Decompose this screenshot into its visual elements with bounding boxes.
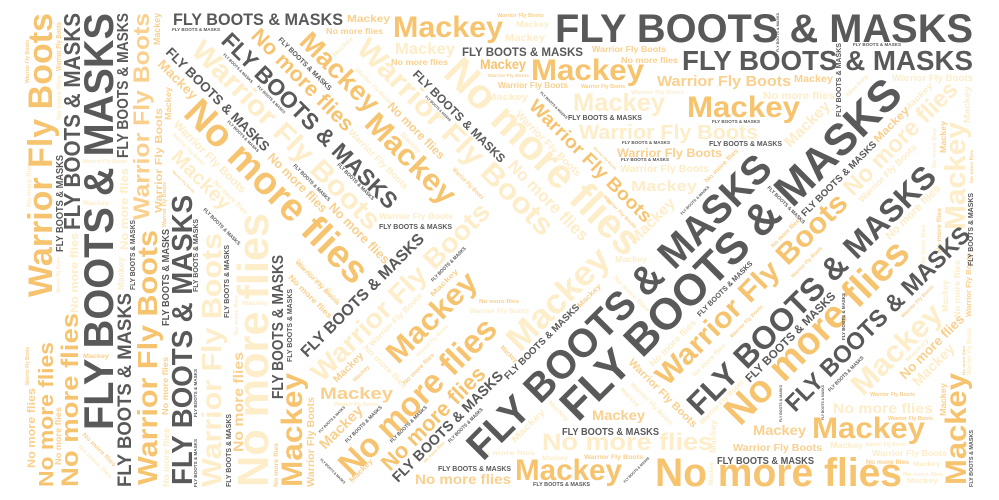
word: No more flies: No more flies <box>326 27 384 36</box>
word: No more flies vertical: No more flies <box>937 207 943 253</box>
word: No more flies vertical: No more flies <box>54 406 63 465</box>
word: Mackey: Mackey <box>542 456 569 462</box>
word: Mackey falling: Mackey <box>619 387 640 409</box>
word: Warrior Fly Boots vertical: Warrior Fly Boots <box>25 40 31 83</box>
word: No more flies vertical: No more flies <box>57 313 84 487</box>
word: No more flies vertical: No more flies <box>69 233 81 313</box>
word: Warrior Fly Boots: Warrior Fly Boots <box>865 442 906 448</box>
word: Warrior Fly Boots vertical: Warrior Fly Boots <box>196 233 227 487</box>
word: No more flies vertical: No more flies <box>961 345 966 375</box>
word: Warrior Fly Boots: Warrior Fly Boots <box>579 122 758 144</box>
word: Warrior Fly Boots vertical: Warrior Fly Boots <box>25 347 31 385</box>
word: Mackey: Mackey <box>687 91 800 124</box>
word: No more flies rising large: No more flies <box>716 231 918 433</box>
word: Mackey rising: Mackey <box>317 403 367 453</box>
word: Warrior Fly Boots: Warrior Fly Boots <box>631 90 684 96</box>
word: Warrior Fly Boots diagonal: Warrior Fly Boots <box>186 34 387 236</box>
word: Mackey rising: Mackey <box>380 265 484 370</box>
word: Warrior Fly Boots rising: Warrior Fly Boots <box>729 304 765 339</box>
phrase: FLY BOOTS & MASKS <box>717 456 815 467</box>
word: Warrior Fly Boots vertical: Warrior Fly Boots <box>306 397 317 487</box>
word: No more flies rising large: No more flies <box>331 310 505 484</box>
word: Mackey: Mackey <box>242 301 269 307</box>
word: No more flies falling: No more flies <box>294 256 343 306</box>
word: Mackey top: Mackey <box>393 11 503 44</box>
word: No more flies: No more flies <box>621 56 679 65</box>
word: No more flies: No more flies <box>479 299 519 305</box>
word: Mackey rising: Mackey <box>845 73 871 98</box>
word: No more flies huge vertical: No more flies <box>229 213 278 487</box>
word: No more flies falling: No more flies <box>326 200 393 267</box>
word: Mackey: Mackey <box>531 54 644 87</box>
phrase: FLY BOOTS & MASKS <box>438 464 511 473</box>
word: Warrior Fly Boots rising: Warrior Fly Boots <box>367 291 425 348</box>
word: No more flies: No more flies <box>391 58 449 67</box>
word: No more flies falling: No more flies <box>612 275 650 314</box>
vertical phrase: FLY BOOTS & MASKS <box>224 414 233 487</box>
rising phrase: FLY BOOTS & MASKS <box>502 302 583 382</box>
word: Warrior Fly Boots falling: Warrior Fly Boots <box>629 381 674 427</box>
falling phrase: FLY BOOTS & MASKS <box>336 162 376 202</box>
vertical phrase: FLY BOOTS & MASKS <box>222 245 231 318</box>
word: Warrior Fly Boots: Warrior Fly Boots <box>584 454 643 461</box>
falling phrase: FLY BOOTS & MASKS <box>163 45 272 154</box>
small phrase: FLY BOOTS & MASKS <box>621 157 669 162</box>
word: No more flies falling: No more flies <box>81 432 117 469</box>
word: Mackey: Mackey <box>395 41 455 58</box>
phrase: FLY BOOTS & MASKS <box>533 482 590 488</box>
word: Mackey: Mackey <box>830 441 864 450</box>
word: Warrior Fly Boots: Warrior Fly Boots <box>497 13 544 19</box>
word: Warrior Fly Boots vertical: Warrior Fly Boots <box>966 253 973 317</box>
rising phrase: FLY BOOTS & MASKS <box>430 246 468 283</box>
vertical phrase: FLY BOOTS & MASKS <box>161 228 172 326</box>
word: Warrior Fly Boots vertical: Warrior Fly Boots <box>56 257 62 293</box>
word: Warrior Fly Boots falling: Warrior Fly Boots <box>294 260 341 307</box>
word: Mackey vertical right: Mackey <box>940 373 973 485</box>
word: Warrior Fly Boots: Warrior Fly Boots <box>83 159 127 165</box>
rising phrase: FLY BOOTS & MASKS <box>695 259 755 318</box>
word: Warrior Fly Boots diagonal: Warrior Fly Boots <box>350 32 560 242</box>
falling phrase: FLY BOOTS & MASKS <box>226 119 260 153</box>
word: Warrior Fly Boots rising large: Warrior Fly Boots <box>649 187 854 392</box>
word: Mackey rising: Mackey <box>352 364 372 383</box>
vertical phrase: FLY BOOTS & MASKS <box>285 289 294 362</box>
word: Mackey rising: Mackey <box>332 35 355 58</box>
vertical phrase: FLY BOOTS & MASKS <box>779 384 783 422</box>
word: Warrior Fly Boots falling: Warrior Fly Boots <box>592 146 617 171</box>
word: No more flies vertical: No more flies <box>57 74 63 120</box>
word: No more flies vertical: No more flies <box>36 342 58 487</box>
falling phrase: FLY BOOTS & MASKS <box>292 163 332 203</box>
word: Warrior Fly Boots: Warrior Fly Boots <box>334 402 378 408</box>
word: Mackey: Mackey <box>907 478 938 485</box>
word: Mackey: Mackey <box>794 74 833 85</box>
word: Mackey: Mackey <box>320 384 394 403</box>
word: Mackey falling: Mackey <box>166 146 236 215</box>
falling phrase: FLY BOOTS & MASKS <box>766 185 806 226</box>
word: Warrior Fly Boots: Warrior Fly Boots <box>888 416 933 422</box>
word: No more flies: No more flies <box>478 451 536 457</box>
word: No more flies large: No more flies <box>542 429 713 456</box>
word: Warrior Fly Boots falling: Warrior Fly Boots <box>171 132 206 168</box>
word: No more flies vertical: No more flies <box>969 149 974 183</box>
word: Warrior Fly Boots rising: Warrior Fly Boots <box>415 324 450 358</box>
vertical phrase: FLY BOOTS & MASKS <box>193 369 198 417</box>
word: Warrior Fly Boots: Warrior Fly Boots <box>872 449 948 458</box>
word: Warrior Fly Boots falling: Warrior Fly Boots <box>171 119 248 196</box>
word: Mackey rising: Mackey <box>576 283 603 309</box>
word: No more flies falling: No more flies <box>287 273 334 321</box>
small phrase: FLY BOOTS & MASKS <box>853 42 901 47</box>
word: Mackey: Mackey <box>573 89 665 117</box>
rising phrase: FLY BOOTS & MASKS <box>827 355 866 393</box>
word: Mackey vertical: Mackey <box>116 257 126 290</box>
word: No more flies falling large: No more flies <box>176 91 377 292</box>
word: Warrior Fly Boots vertical: Warrior Fly Boots <box>129 13 154 220</box>
rising phrase: FLY BOOTS & MASKS <box>298 230 428 361</box>
vertical phrase: FLY BOOTS & MASKS <box>167 195 199 485</box>
word: No more flies falling: No more flies <box>362 343 409 391</box>
word: No more flies: No more flies <box>866 460 910 466</box>
word: No more flies bottom: No more flies <box>655 451 902 495</box>
word: No more flies vertical: No more flies <box>26 388 38 468</box>
word: Mackey rising: Mackey <box>872 104 913 145</box>
word: No more flies falling: No more flies <box>77 444 113 481</box>
word: Mackey vertical: Mackey <box>709 461 715 485</box>
vertical phrase: FLY BOOTS & MASKS <box>821 384 825 420</box>
word: Warrior Fly Boots falling: Warrior Fly Boots <box>347 127 410 191</box>
word: Mackey vertical: Mackey <box>941 279 950 312</box>
word: Mackey rising: Mackey <box>902 80 935 113</box>
word: FLY BOOTS & MASKS top right: FLY BOOTS & MASKS <box>555 7 973 51</box>
falling phrase: FLY BOOTS & MASKS <box>424 95 452 123</box>
word: Mackey rising: Mackey <box>781 97 834 151</box>
word: Warrior Fly Boots big vertical: Warrior Fly Boots <box>132 230 163 485</box>
word: FLY BOOTS & MASKS second: FLY BOOTS & MASKS <box>682 45 973 76</box>
word: No more flies rising: No more flies <box>691 342 728 378</box>
word: Mackey rising: Mackey <box>509 407 547 444</box>
word: No more flies: No more flies <box>415 472 511 487</box>
word: Warrior Fly Boots: Warrior Fly Boots <box>470 308 529 315</box>
word: Mackey falling: Mackey <box>358 107 463 211</box>
rising phrase: FLY BOOTS & MASKS <box>743 290 839 385</box>
word: No more flies falling: No more flies <box>246 24 358 136</box>
word: No more flies rising: No more flies <box>376 361 490 476</box>
word: Mackey vertical: Mackey <box>164 86 173 120</box>
small phrase: FLY BOOTS & MASKS <box>622 140 670 145</box>
falling phrase: FLY BOOTS & MASKS <box>222 52 254 84</box>
word: Warrior Fly Boots rising: Warrior Fly Boots <box>900 284 936 319</box>
falling phrase: FLY BOOTS & MASKS <box>277 36 333 93</box>
rising phrase: FLY BOOTS & MASKS <box>447 407 485 444</box>
word: Warrior Fly Boots: Warrior Fly Boots <box>620 164 709 175</box>
rising phrase: FLY BOOTS & MASKS <box>344 404 384 444</box>
word: Warrior Fly Boots: Warrior Fly Boots <box>892 73 973 83</box>
rising phrase: FLY BOOTS & MASKS <box>389 404 429 444</box>
word: Warrior Fly Boots big vertical: Warrior Fly Boots <box>22 13 60 297</box>
word: No more flies: No more flies <box>903 472 943 478</box>
word: Mackey vertical: Mackey <box>939 382 948 416</box>
word: No more flies falling: No more flies <box>385 99 448 162</box>
word: Warrior Fly Boots vertical: Warrior Fly Boots <box>967 327 973 375</box>
word: No more flies huge diagonal: No more flies <box>436 48 652 265</box>
small phrase: FLY BOOTS & MASKS <box>172 27 220 32</box>
word: Warrior Fly Boots rising: Warrior Fly Boots <box>305 196 496 387</box>
word: Mackey: Mackey <box>913 461 940 468</box>
word: No more flies vertical: No more flies <box>119 168 131 250</box>
word: Mackey: Mackey <box>753 422 806 438</box>
word: Warrior Fly Boots: Warrior Fly Boots <box>733 443 822 454</box>
rising phrase: FLY BOOTS & MASKS <box>680 185 711 216</box>
word: Mackey vertical: Mackey <box>709 419 718 453</box>
word: Warrior Fly Boots falling: Warrior Fly Boots <box>171 170 195 194</box>
word: Mackey: Mackey <box>83 354 110 360</box>
vertical phrase: FLY BOOTS & MASKS <box>193 439 198 487</box>
word: Mackey rising: Mackey <box>347 456 375 484</box>
word: Mackey falling: Mackey <box>499 344 518 364</box>
word: Mackey vertical: Mackey <box>939 120 948 153</box>
phrase: FLY BOOTS & MASKS <box>709 139 782 148</box>
word: Warrior Fly Boots falling: Warrior Fly Boots <box>525 95 657 227</box>
rising phrase, fourth: FLY BOOTS & MASKS <box>780 221 976 417</box>
word: No more flies rising: No more flies <box>402 352 437 386</box>
rising phrase, third: FLY BOOTS & MASKS <box>679 158 943 422</box>
word: Mackey falling: Mackey <box>547 400 570 423</box>
word: Warrior Fly Boots vertical: Warrior Fly Boots <box>162 182 168 227</box>
word: Mackey bottom right: Mackey <box>812 412 925 445</box>
small phrase: FLY BOOTS & MASKS <box>712 119 760 124</box>
word: No more flies rising: No more flies <box>770 218 802 249</box>
word: Mackey falling: Mackey <box>294 26 386 118</box>
word: No more flies vertical: No more flies <box>932 128 938 168</box>
vertical phrase: FLY BOOTS & MASKS <box>270 255 287 399</box>
word: Mackey bottom: Mackey <box>515 454 622 487</box>
phrase: FLY BOOTS & MASKS <box>562 427 660 438</box>
word: No more flies vertical: No more flies <box>274 442 280 487</box>
word: No more flies: No more flies <box>763 91 835 102</box>
rising phrase: FLY BOOTS & MASKS <box>390 368 507 486</box>
word: No more flies vertical: No more flies <box>921 225 927 265</box>
vertical phrase: FLY BOOTS & MASKS <box>128 220 137 290</box>
word: Mackey rising: Mackey <box>909 340 958 389</box>
word: Mackey: Mackey <box>631 178 698 195</box>
word: No more flies rising: No more flies <box>703 147 741 184</box>
word: No more flies rising: No more flies <box>647 318 698 368</box>
vertical phrase: FLY BOOTS & MASKS <box>115 13 132 158</box>
word: Mackey rising: Mackey <box>905 337 931 363</box>
word: No more flies vertical: No more flies <box>161 356 170 415</box>
falling phrase: FLY BOOTS & MASKS <box>202 207 242 247</box>
vertical phrase: FLY BOOTS & MASKS <box>115 293 136 487</box>
vertical phrase: FLY BOOTS & MASKS <box>191 219 200 292</box>
word: Warrior Fly Boots falling: Warrior Fly Boots <box>602 194 638 230</box>
word: No more flies vertical: No more flies <box>230 352 246 452</box>
rising phrase: FLY BOOTS & MASKS <box>623 456 651 484</box>
word: Mackey falling: Mackey <box>399 131 422 155</box>
rising phrase, largest: FLY BOOTS & MASKS <box>550 69 912 430</box>
word: Mackey: Mackey <box>487 92 528 102</box>
word: No more flies rising: No more flies <box>422 440 446 464</box>
word: Warrior Fly Boots falling: Warrior Fly Boots <box>513 109 583 180</box>
phrase: FLY BOOTS & MASKS <box>379 222 452 231</box>
word: Mackey large rising: Mackey <box>499 240 618 359</box>
word: FLY BOOTS & MASKS top left: FLY BOOTS & MASKS <box>173 11 343 29</box>
phrase: FLY BOOTS & MASKS <box>462 45 583 59</box>
word: Mackey large vertical: Mackey <box>940 122 972 230</box>
word: Mackey: Mackey <box>480 56 526 72</box>
vertical phrase: FLY BOOTS & MASKS <box>55 154 66 252</box>
word: Mackey: Mackey <box>615 255 648 264</box>
word: Mackey rising: Mackey <box>331 350 366 385</box>
word: Mackey vertical: Mackey <box>152 13 162 45</box>
word: Mackey: Mackey <box>516 20 550 29</box>
word: Warrior Fly Boots: Warrior Fly Boots <box>592 45 667 54</box>
word: No more flies rising: No more flies <box>897 311 967 382</box>
word: No more flies vertical: No more flies <box>27 162 33 207</box>
word: Warrior Fly Boots falling: Warrior Fly Boots <box>626 357 700 430</box>
rising phrase, second: FLY BOOTS & MASKS <box>458 146 781 468</box>
word: Mackey: Mackey <box>592 407 645 423</box>
vertical phrase: FLY BOOTS & MASKS <box>969 430 975 487</box>
word: Mackey rising: Mackey <box>429 268 460 298</box>
vertical phrase: FLY BOOTS & MASKS <box>966 193 975 266</box>
word: Warrior Fly Boots vertical: Warrior Fly Boots <box>56 22 63 71</box>
word: Warrior Fly Boots: Warrior Fly Boots <box>617 146 722 160</box>
word: Warrior Fly Boots rising: Warrior Fly Boots <box>698 379 746 426</box>
word: Warrior Fly Boots: Warrior Fly Boots <box>657 73 791 90</box>
word: No more flies vertical: No more flies <box>953 259 962 318</box>
phrase: FLY BOOTS & MASKS <box>568 113 642 122</box>
word: No more flies large rising: No more flies <box>838 76 963 201</box>
word: Warrior Fly Boots: Warrior Fly Boots <box>581 84 625 90</box>
word: No more flies rising: No more flies <box>884 183 943 242</box>
word: No more flies: No more flies <box>833 400 933 416</box>
word: Mackey: Mackey <box>505 33 545 44</box>
falling phrase: FLY BOOTS & MASKS <box>319 458 347 485</box>
falling phrase: FLY BOOTS & MASKS <box>256 84 287 115</box>
word: Warrior Fly Boots: Warrior Fly Boots <box>870 392 915 398</box>
word: Mackey falling: Mackey <box>155 57 201 103</box>
word: Mackey large rising: Mackey <box>845 297 949 402</box>
vertical phrase: FLY BOOTS & MASKS <box>841 292 847 340</box>
word: No more flies falling: No more flies <box>504 156 593 245</box>
word: Warrior Fly Boots rising: Warrior Fly Boots <box>790 245 824 279</box>
vertical phrase: FLY BOOTS & MASKS <box>775 13 780 52</box>
word: No more flies vertical: No more flies <box>162 427 171 487</box>
word: Mackey vertical: Mackey <box>276 373 309 487</box>
vertical phrase: FLY BOOTS & MASKS <box>834 43 843 117</box>
word: Warrior Fly Boots: Warrior Fly Boots <box>498 81 569 90</box>
word: Warrior Fly Boots: Warrior Fly Boots <box>379 212 454 221</box>
word: No more flies vertical: No more flies <box>234 295 240 335</box>
word: Warrior Fly Boots falling: Warrior Fly Boots <box>451 167 485 201</box>
word: Mackey vertical: Mackey <box>962 86 972 123</box>
vertical phrase, largest left: FLY BOOTS & MASKS <box>75 13 122 430</box>
word: Mackey: Mackey <box>347 13 390 25</box>
word: Mackey: Mackey <box>83 201 110 207</box>
word: No more flies falling: No more flies <box>212 179 248 216</box>
word: Warrior Fly Boots vertical: Warrior Fly Boots <box>154 107 165 213</box>
falling phrase: FLY BOOTS & MASKS <box>539 91 569 120</box>
word: No more flies falling: No more flies <box>265 150 330 215</box>
word: Warrior Fly Boots rising: Warrior Fly Boots <box>856 142 919 204</box>
word: Warrior Fly Boots: Warrior Fly Boots <box>488 73 530 78</box>
word: Warrior Fly Boots falling: Warrior Fly Boots <box>354 67 393 107</box>
word: Mackey rising: Mackey <box>626 194 679 248</box>
rising phrase: FLY BOOTS & MASKS <box>318 405 347 434</box>
falling phrase: FLY BOOTS & MASKS <box>216 27 403 214</box>
rising phrase: FLY BOOTS & MASKS <box>799 139 880 219</box>
falling phrase: FLY BOOTS & MASKS <box>410 67 508 166</box>
